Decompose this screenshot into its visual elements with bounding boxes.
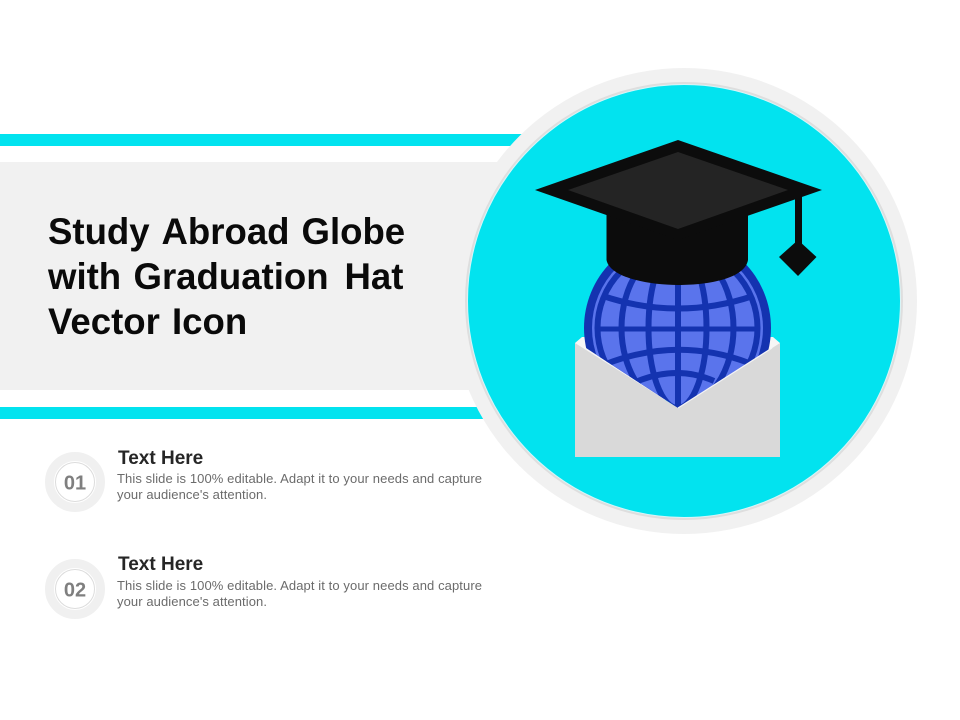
mortarboard outer xyxy=(535,140,822,240)
title xyxy=(47,211,405,342)
title: Globe xyxy=(302,211,405,252)
item heading: Text xyxy=(118,554,156,575)
title: Vector xyxy=(48,301,160,342)
bottom cyan band xyxy=(0,407,500,419)
outer ring xyxy=(451,68,917,534)
item heading: Text xyxy=(118,448,156,469)
item body text: your audience's attention. xyxy=(117,594,267,609)
icon: graduation hat xyxy=(535,140,822,285)
number badge 01 xyxy=(50,456,100,508)
tassel cord xyxy=(795,194,802,244)
number badge 02 xyxy=(50,564,100,614)
icon: envelope front xyxy=(575,343,780,457)
item body text: This slide is 100% editable. Adapt it to your needs and capture xyxy=(117,578,482,593)
item body text: This slide is 100% editable. Adapt it to your needs and capture xyxy=(117,471,482,486)
item 02 xyxy=(50,554,482,614)
title: Study xyxy=(48,211,150,252)
icon: globe xyxy=(584,264,771,408)
hat base xyxy=(606,205,748,285)
number badge 02: 02 xyxy=(64,580,86,602)
icon: envelope fold highlight xyxy=(678,348,772,408)
title: Graduation xyxy=(134,256,329,297)
item heading: Here xyxy=(161,554,203,575)
tassel diamond xyxy=(779,240,816,276)
title panel background xyxy=(0,162,520,390)
mortarboard top xyxy=(568,152,788,229)
title: Abroad xyxy=(162,211,290,252)
item body text: your audience's attention. xyxy=(117,487,267,502)
title: Icon xyxy=(172,301,247,342)
item heading: Here xyxy=(161,448,203,469)
inner ring shadow xyxy=(465,82,903,520)
top cyan band xyxy=(0,134,530,146)
item body text xyxy=(117,578,482,609)
number badge 01: 01 xyxy=(64,472,86,494)
title: Hat xyxy=(344,256,403,297)
icon medallion xyxy=(451,68,917,534)
icon: envelope back xyxy=(575,337,780,400)
item body text xyxy=(117,471,482,502)
item 01 xyxy=(50,448,482,508)
cyan disc xyxy=(468,84,900,518)
title: with xyxy=(47,256,121,297)
